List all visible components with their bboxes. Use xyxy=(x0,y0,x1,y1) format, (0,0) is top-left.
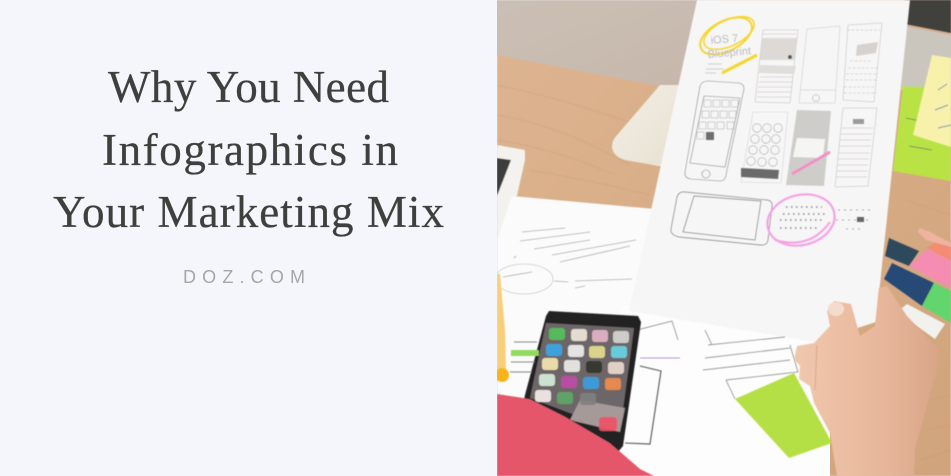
yellow pen xyxy=(495,274,509,382)
settings screen xyxy=(755,30,798,103)
yellow circled title: iOS 7 xyxy=(710,33,739,47)
app icons xyxy=(535,328,629,431)
keyboard screen xyxy=(843,23,882,102)
settings list screen xyxy=(835,108,877,187)
landscape phone xyxy=(671,192,772,245)
green note on sketch xyxy=(735,373,832,458)
title: Your Marketing Mix xyxy=(53,187,444,237)
smartphone xyxy=(520,311,641,452)
alert screen xyxy=(786,110,831,186)
title: Infographics in xyxy=(102,125,398,175)
wall and desk xyxy=(490,0,951,476)
handwritten notes xyxy=(495,228,636,294)
markers xyxy=(884,228,951,339)
title xyxy=(53,62,444,237)
source label: DOZ.COM xyxy=(183,267,305,287)
monitor stand xyxy=(612,85,684,167)
red shirt xyxy=(497,394,654,476)
wireframe sketches xyxy=(671,10,882,252)
left panel background xyxy=(0,0,497,476)
portrait phone xyxy=(685,81,744,181)
dial pad screen xyxy=(741,112,788,183)
yellow circled title xyxy=(694,10,759,73)
yellow circled title: Blueprint xyxy=(707,45,752,61)
left doodles near phone xyxy=(510,342,539,372)
tablet xyxy=(497,145,525,240)
blank camera screen xyxy=(799,26,840,103)
main wireframe paper xyxy=(629,0,910,342)
hand xyxy=(794,286,938,476)
pink circled keyboard xyxy=(762,188,870,252)
monitor and green sheet xyxy=(893,0,951,181)
photo: desk with wireframes xyxy=(490,0,951,476)
notes sheet xyxy=(497,196,655,476)
sketches below paper xyxy=(625,321,798,444)
title: Why You Need xyxy=(108,62,389,112)
sticky note xyxy=(913,55,951,147)
